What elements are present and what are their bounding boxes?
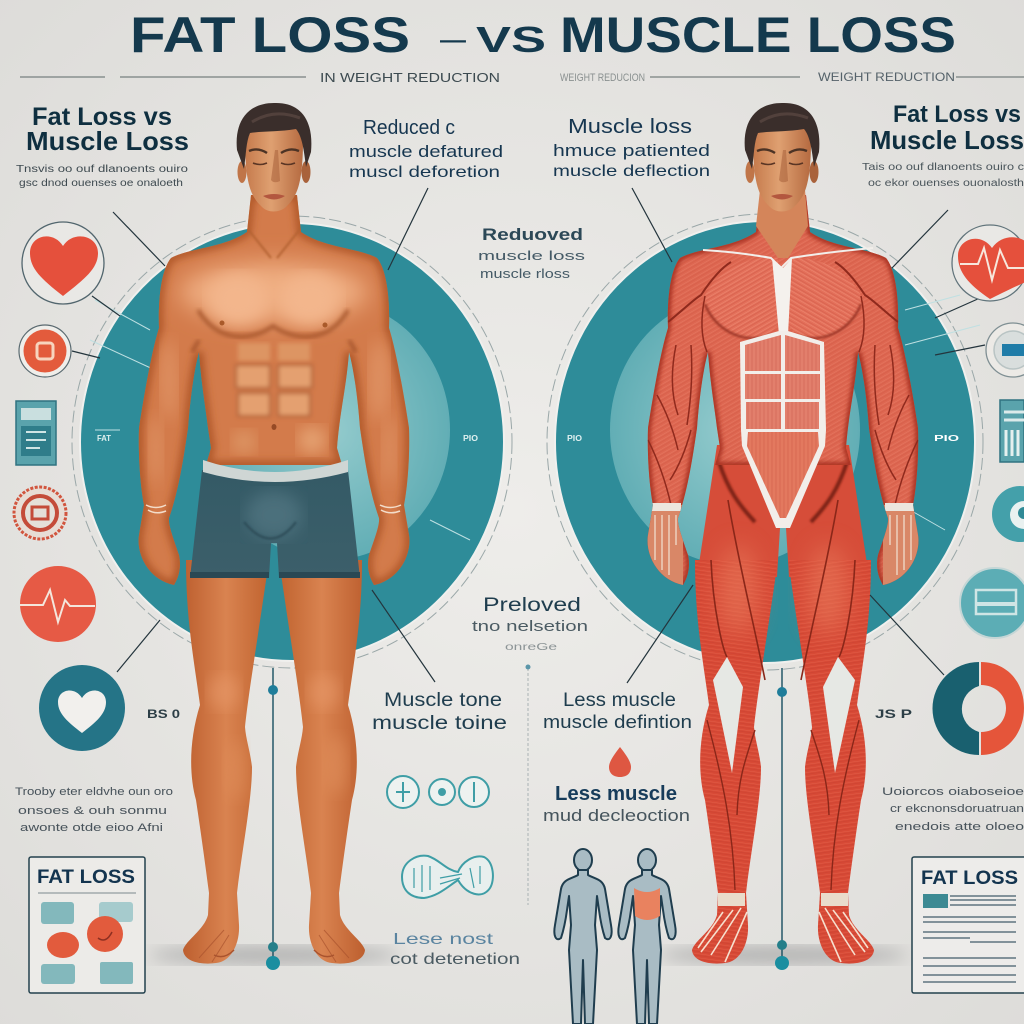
callout: less nost xyxy=(390,931,520,968)
pectorals xyxy=(703,258,778,338)
abdominal wall xyxy=(740,331,826,528)
torso and arms xyxy=(139,195,409,585)
callout: muscle loss top right: muscle deflection xyxy=(553,163,710,180)
right small text: oc ekor ouenses ouonalosth xyxy=(868,178,1024,189)
callout: reduced top left: muscle defatured xyxy=(349,142,503,161)
muscle torso and arms xyxy=(643,195,923,590)
icon: heart with pulse right xyxy=(952,225,1024,301)
callout: muscle loss top right: Muscle loss xyxy=(568,116,692,138)
callout: reduced middle: muscle rloss xyxy=(480,266,571,281)
leader lines xyxy=(72,188,985,683)
panel: left circle xyxy=(72,216,512,668)
circle labels: PIO xyxy=(934,434,959,443)
shorts xyxy=(190,460,360,578)
chart: donut xyxy=(933,662,1024,755)
abs xyxy=(220,320,328,454)
figure: muscle loss body xyxy=(643,103,923,964)
callout: less muscle one xyxy=(543,690,692,732)
callout: reduced middle: muscle loss xyxy=(478,248,586,263)
callout: preloved: tno nelsetion xyxy=(472,618,588,635)
icon: seal xyxy=(14,487,66,539)
callout: reduced middle: Reduoved xyxy=(482,225,583,244)
icon: teal card xyxy=(16,401,56,465)
right heading: Muscle Loss xyxy=(870,125,1024,155)
icon: two body silhouettes xyxy=(554,849,676,1024)
callout: reduced top left: Reduced c xyxy=(363,117,455,139)
silhouette two xyxy=(618,849,676,1024)
labels near donut and heart xyxy=(147,707,912,721)
bottom left text: Trooby eter eldvhe oun oro xyxy=(15,786,173,798)
left heading: Muscle Loss xyxy=(26,126,189,156)
right small text xyxy=(862,162,1024,189)
circle labels: FAT xyxy=(97,434,111,443)
bottom right text: Uoiorcos oiaboseioe xyxy=(882,786,1024,798)
legs xyxy=(183,560,365,964)
title: MUSCLE LOSS xyxy=(560,7,956,63)
floor shadows xyxy=(149,946,908,964)
card: fat loss right: FAT LOSS xyxy=(921,868,1018,889)
icon: teal chart card xyxy=(1000,400,1024,462)
subtitle row: WEIGHT REDUCION xyxy=(560,72,645,84)
bottom left text: awonte otde eioo Afni xyxy=(20,822,163,834)
callout: muscle tone: muscle toine xyxy=(372,713,507,734)
icon: heart circle xyxy=(22,222,104,304)
silhouette one xyxy=(554,849,612,1024)
subtitle row: WEIGHT REDUCTION xyxy=(818,70,955,84)
bottom right text: cr ekcnonsdoruatruan xyxy=(890,803,1024,815)
left small text xyxy=(16,164,189,189)
bottom left text xyxy=(15,786,173,834)
icon: teal heart xyxy=(39,665,125,751)
bottom right text xyxy=(882,786,1024,833)
callout: reduced top left xyxy=(349,117,503,181)
callout: less nost: cot detenetion xyxy=(390,951,520,968)
icon: three circles xyxy=(387,776,489,808)
callout: muscle tone xyxy=(372,690,507,734)
title: VS xyxy=(476,19,546,60)
icon: ring badge right xyxy=(986,323,1024,377)
title xyxy=(130,7,956,63)
icon: teal device xyxy=(960,568,1024,638)
card: fat loss right xyxy=(912,857,1024,993)
callout: less muscle two: mud decleoction xyxy=(543,806,690,825)
neck skin xyxy=(756,190,808,258)
figure: fat loss body xyxy=(139,103,409,964)
bottom left text: onsoes & ouh sonmu xyxy=(18,805,167,817)
right heading: Fat Loss vs xyxy=(893,101,1021,128)
callout: reduced top left: muscl deforetion xyxy=(349,164,500,181)
callout: muscle loss top right xyxy=(553,116,710,180)
title: FAT LOSS xyxy=(130,7,410,63)
icon: red badge xyxy=(19,325,71,377)
icon: teal thumb xyxy=(992,486,1024,542)
subtitle row xyxy=(20,70,1024,85)
right small text: Tais oo ouf dlanoents ouiro c xyxy=(862,162,1024,173)
card: fat loss left: FAT LOSS xyxy=(37,867,135,888)
card: fat loss left xyxy=(29,857,145,993)
left small text: gsc dnod ouenses oe onaloeth xyxy=(19,178,183,189)
circle labels xyxy=(97,434,959,443)
left heading xyxy=(26,103,189,156)
callout: preloved xyxy=(472,595,588,653)
labels near donut and heart: JS P xyxy=(875,707,912,721)
callout: less nost: Lese nost xyxy=(393,931,494,948)
callout: preloved: Preloved xyxy=(483,595,581,616)
callout: preloved: onreGe xyxy=(505,642,558,653)
title: – xyxy=(440,20,466,58)
circle labels: PIO xyxy=(567,434,582,443)
labels near donut and heart: BS 0 xyxy=(147,707,180,721)
left small text: Tnsvis oo ouf dlanoents ouiro xyxy=(16,164,189,175)
callout: muscle loss top right: hmuce patiented xyxy=(553,141,710,160)
subtitle row: IN WEIGHT REDUCTION xyxy=(320,70,500,85)
panel: right circle xyxy=(547,214,983,670)
left heading: Fat Loss vs xyxy=(32,103,172,131)
icon: muscle fibre xyxy=(402,856,493,898)
icon: red pulse xyxy=(20,566,96,642)
right heading xyxy=(870,101,1024,155)
circle labels: PIO xyxy=(463,434,478,443)
bottom right text: enedois atte oloeo xyxy=(895,821,1024,833)
icon: small droplet xyxy=(609,747,631,777)
callout: less muscle two xyxy=(543,783,690,825)
callout: muscle tone: Muscle tone xyxy=(384,690,502,711)
muscle legs xyxy=(692,445,874,964)
callout: reduced middle xyxy=(478,225,586,281)
callout: less muscle two: Less muscle xyxy=(555,783,677,805)
callout: less muscle one: muscle defintion xyxy=(543,712,692,732)
callout: less muscle one: Less muscle xyxy=(563,690,676,711)
center connector lines xyxy=(266,664,789,970)
